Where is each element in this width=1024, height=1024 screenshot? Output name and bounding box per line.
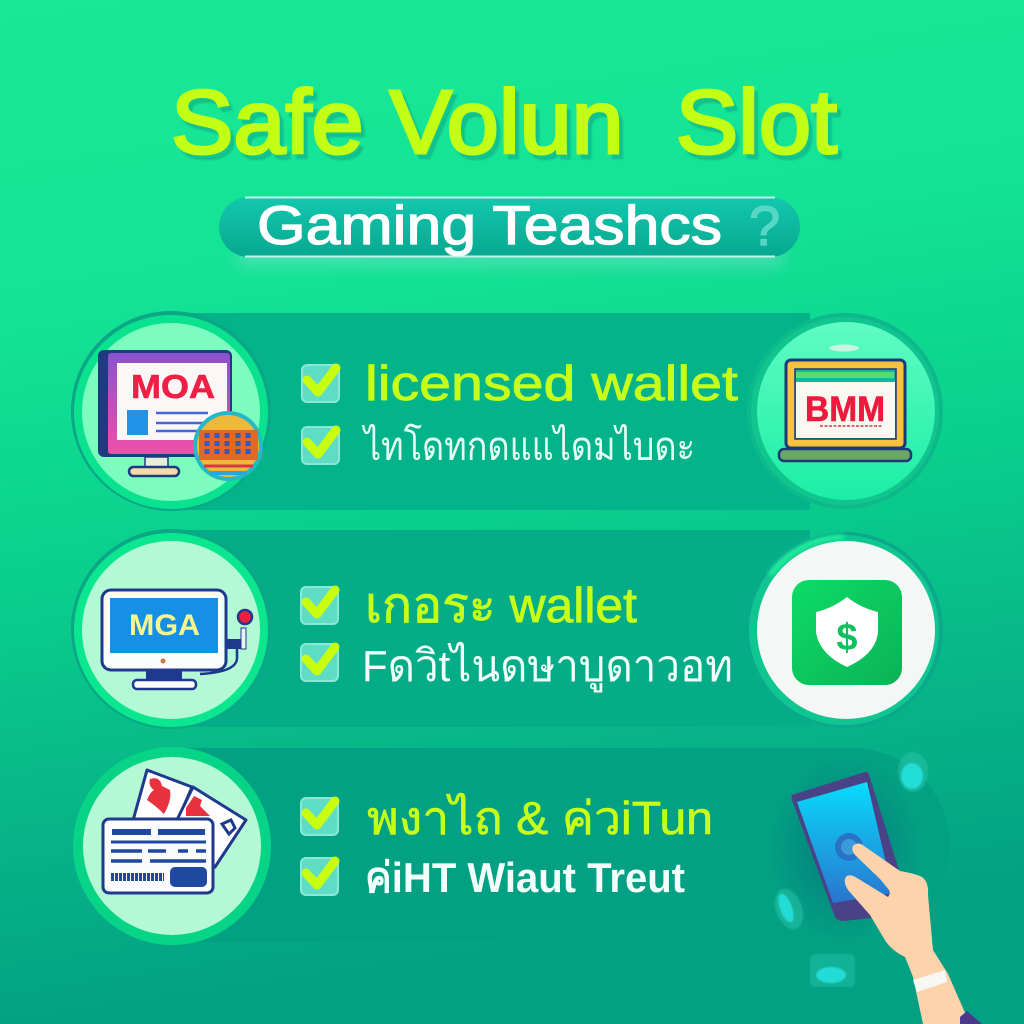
panel: row 1 [170, 313, 810, 510]
credit card [103, 819, 213, 893]
wristband [913, 970, 947, 992]
title: Safe Volun Slot [171, 73, 837, 173]
row 2 description: Fดวิtไนดษาบูดาวอท [362, 641, 733, 693]
panel: row 3 [170, 748, 950, 942]
subtitle pill [219, 194, 800, 268]
icon: slot machine monitor MGA badge [71, 529, 271, 729]
row 1 heading: licensed wallet [365, 357, 738, 411]
icon: credit card and playing cards badge [73, 747, 271, 945]
panel: row 2 [170, 530, 810, 727]
icon: hand tapping smartphone [767, 752, 982, 1024]
row 1 checkbox 1 [302, 365, 339, 402]
row 1 description: ไทโดทกดแแไดมไบดะ [361, 424, 695, 469]
row 2 heading: เกอระ wallet [365, 579, 637, 633]
icon: slot machine monitor MGA badge: MGA [129, 609, 200, 642]
icon: monitor MGA badge: MOA [131, 368, 215, 405]
floating token left [770, 885, 808, 933]
smartphone [792, 772, 899, 921]
icon: green shield dollar badge [747, 532, 943, 728]
floating token bottom [810, 954, 855, 987]
icon: laptop BMM badge [747, 313, 943, 509]
sleeve [960, 1011, 982, 1024]
row 3 description: ค่iHT Wiaut Treut [365, 854, 685, 901]
icon: laptop BMM badge: BMM [805, 390, 885, 429]
hand [845, 844, 982, 1024]
row 3 checkbox 2 [301, 858, 338, 895]
row 3 checkbox 1 [301, 798, 338, 835]
row 2 checkbox 1 [301, 587, 338, 624]
icon: monitor MGA badge [71, 311, 271, 511]
playing card front [172, 787, 246, 867]
subtitle text: Gaming Teashcs [257, 194, 722, 256]
floating token top [898, 752, 928, 792]
row 2 checkbox 2 [301, 644, 338, 681]
title: Safe Volun Slot [175, 78, 841, 178]
playing card back [129, 770, 192, 850]
question mark icon: ? [749, 194, 780, 257]
slot machine medallion [193, 411, 263, 481]
row 1 checkbox 2 [302, 427, 339, 464]
icon: green shield dollar badge: $ [836, 617, 858, 659]
row 3 heading: พงาไถ & ค่วiTun [367, 792, 713, 844]
